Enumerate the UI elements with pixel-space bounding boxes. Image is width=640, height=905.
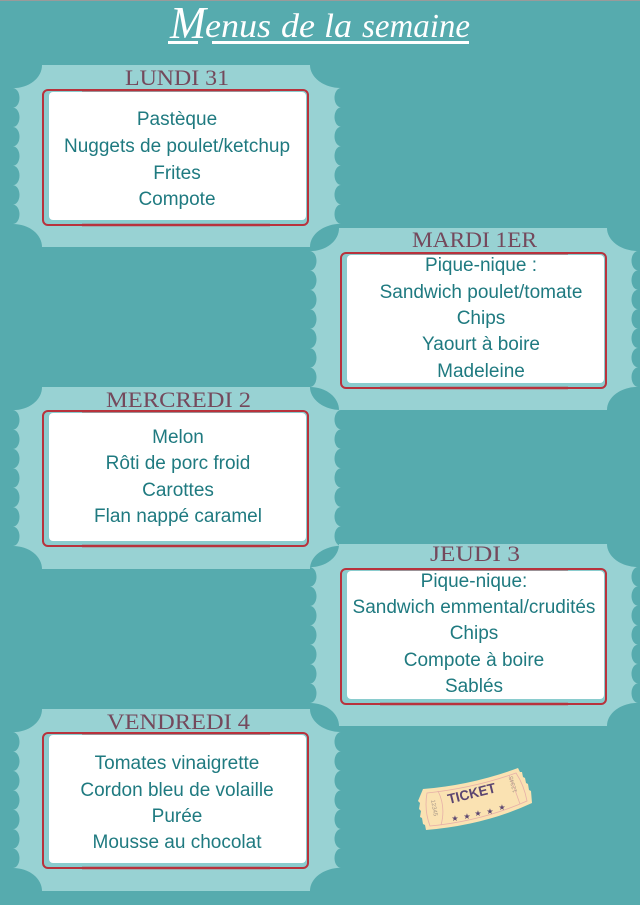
heading: jeudi: JEUDI 3 <box>430 541 520 566</box>
menu: jeudi: Sandwich emmental/crudités <box>353 597 595 618</box>
title: enus <box>205 8 271 45</box>
menu: lundi <box>64 109 290 210</box>
icon: ticket: 12345 <box>429 799 438 817</box>
icon: ticket: TICKET <box>446 779 498 807</box>
title: de <box>281 8 315 45</box>
menu: lundi: Nuggets de poulet/ketchup <box>64 136 290 157</box>
menu: jeudi <box>353 571 595 697</box>
icon: ticket: ★ <box>474 809 482 818</box>
menu: mercredi: Carottes <box>142 480 214 501</box>
panel: jeudi <box>310 541 638 726</box>
menu: jeudi: Compote à boire <box>404 650 544 671</box>
title: semaine <box>362 8 470 45</box>
menu: mardi: Yaourt à boire <box>422 334 540 355</box>
menu: mardi: Chips <box>457 308 505 329</box>
heading: vendredi: VENDREDI 4 <box>107 709 250 734</box>
panel: vendredi <box>13 709 341 891</box>
icon: ticket <box>418 768 532 830</box>
icon: ticket: ★ <box>498 803 506 812</box>
heading: mercredi: MERCREDI 2 <box>106 387 251 412</box>
menu: mercredi: Melon <box>152 427 204 448</box>
panel: lundi <box>13 65 341 247</box>
menu: mardi: Sandwich poulet/tomate <box>380 282 582 303</box>
icon: ticket: 12345 <box>509 775 519 793</box>
menu: vendredi: Tomates vinaigrette <box>95 753 259 774</box>
icon: ticket: ★ <box>486 807 494 816</box>
menu: vendredi <box>80 753 274 853</box>
menu: jeudi: Pique-nique: <box>421 571 527 592</box>
heading: lundi: LUNDI 31 <box>125 65 229 90</box>
menu: vendredi: Cordon bleu de volaille <box>80 780 274 801</box>
menu: mardi <box>380 255 582 382</box>
menu: vendredi: Mousse au chocolat <box>92 832 262 853</box>
menu: lundi: Frites <box>153 163 201 184</box>
heading: mardi: MARDI 1ER <box>412 227 537 252</box>
menu: mardi: Madeleine <box>437 361 525 382</box>
menu: jeudi: Sablés <box>445 676 503 697</box>
menu: mercredi <box>94 427 262 527</box>
icon: ticket: ★ <box>451 814 459 823</box>
menu: lundi: Pastèque <box>137 109 217 130</box>
menu: mardi: Pique-nique : <box>425 255 537 276</box>
menu: vendredi: Purée <box>152 806 202 827</box>
menu: lundi: Compote <box>138 189 216 210</box>
title <box>168 0 470 48</box>
panel: mercredi <box>13 387 341 569</box>
title: la <box>324 8 352 45</box>
menu: jeudi: Chips <box>450 623 498 644</box>
menu: mercredi: Rôti de porc froid <box>106 453 250 474</box>
icon: ticket: ★ <box>463 812 471 821</box>
panel: mardi <box>310 227 638 410</box>
menu: mercredi: Flan nappé caramel <box>94 506 262 527</box>
